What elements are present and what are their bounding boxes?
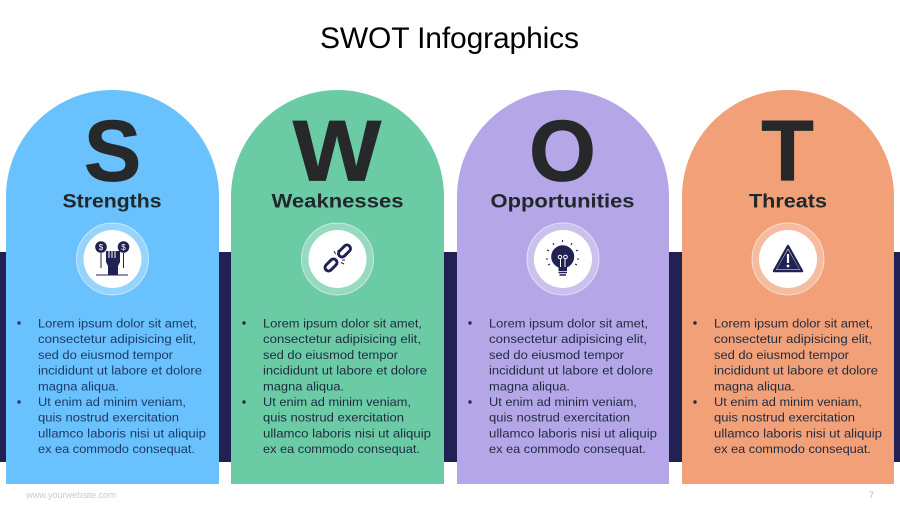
text block: weaknesses: ex ea commodo consequat. [263,442,420,456]
text block: opportunities: ullamco laboris nisi ut aliquip [489,426,657,440]
title: SWOT Infographics [320,22,579,55]
text block: threats: Ut enim ad minim veniam, [714,395,862,409]
icon: fist with coins [76,223,148,295]
text block: strengths: ullamco laboris nisi ut aliquip [38,426,206,440]
icon: fist with coins: $ [99,243,104,252]
text block: opportunities: magna aliqua. [489,379,570,393]
heading: Strengths: Strengths [62,191,162,213]
icon: light bulb [527,223,599,295]
text block: strengths: magna aliqua. [38,379,119,393]
heading: Threats: Threats [749,191,827,213]
text block: threats: magna aliqua. [714,379,795,393]
text block: threats: ullamco laboris nisi ut aliquip [714,426,882,440]
text block: opportunities: quis nostrud exercitation [489,411,630,425]
icon: fist with coins: $ [121,243,126,252]
text block: threats: quis nostrud exercitation [714,411,855,425]
text block: weaknesses: magna aliqua. [263,379,344,393]
text block: threats: Lorem ipsum dolor sit amet, [714,316,873,330]
text block: weaknesses: incididunt ut labore et dolore [263,364,427,378]
text block: weaknesses [242,316,431,456]
footer: page number: 7 [869,490,874,500]
text block: threats: sed do eiusmod tempor [714,348,849,362]
text block: strengths: sed do eiusmod tempor [38,348,173,362]
text block: strengths: consectetur adipisicing elit, [38,332,196,346]
letter T: T [761,104,814,200]
dark navy background band [0,252,900,462]
footer: website: www.yourwebsite.com [25,490,116,501]
text block: threats: ex ea commodo consequat. [714,442,871,456]
letter O: O [529,104,596,200]
text block: weaknesses: ullamco laboris nisi ut aliquip [263,426,431,440]
text block: opportunities: consectetur adipisicing elit, [489,332,647,346]
letter S: S [84,104,141,200]
icon: warning triangle [752,223,824,295]
text block: opportunities: incididunt ut labore et dolore [489,364,653,378]
text block: opportunities: ex ea commodo consequat. [489,442,646,456]
text block: strengths: ex ea commodo consequat. [38,442,195,456]
text block: strengths [17,316,206,456]
text block: weaknesses: sed do eiusmod tempor [263,348,398,362]
text block: weaknesses: consectetur adipisicing elit, [263,332,421,346]
text block: weaknesses: Ut enim ad minim veniam, [263,395,411,409]
text block: opportunities [468,316,657,456]
icon: broken chain [302,223,374,295]
text block: weaknesses: quis nostrud exercitation [263,411,404,425]
text block: strengths: Lorem ipsum dolor sit amet, [38,316,197,330]
text block: weaknesses: Lorem ipsum dolor sit amet, [263,316,422,330]
letter W: W [293,104,381,200]
text block: threats: consectetur adipisicing elit, [714,332,872,346]
panel: threats [682,90,894,484]
panel: strengths [6,90,219,484]
panel: weaknesses [231,90,444,484]
text block: opportunities: Lorem ipsum dolor sit amet, [489,316,648,330]
text block: threats [693,316,882,456]
panel: opportunities [457,90,669,484]
heading: Opportunities: Opportunities [490,191,635,213]
text block: strengths: incididunt ut labore et dolore [38,364,202,378]
text block: strengths: quis nostrud exercitation [38,411,179,425]
text block: opportunities: Ut enim ad minim veniam, [489,395,637,409]
text block: strengths: Ut enim ad minim veniam, [38,395,186,409]
text block: opportunities: sed do eiusmod tempor [489,348,624,362]
heading: Weaknesses: Weaknesses [272,191,404,213]
text block: threats: incididunt ut labore et dolore [714,364,878,378]
